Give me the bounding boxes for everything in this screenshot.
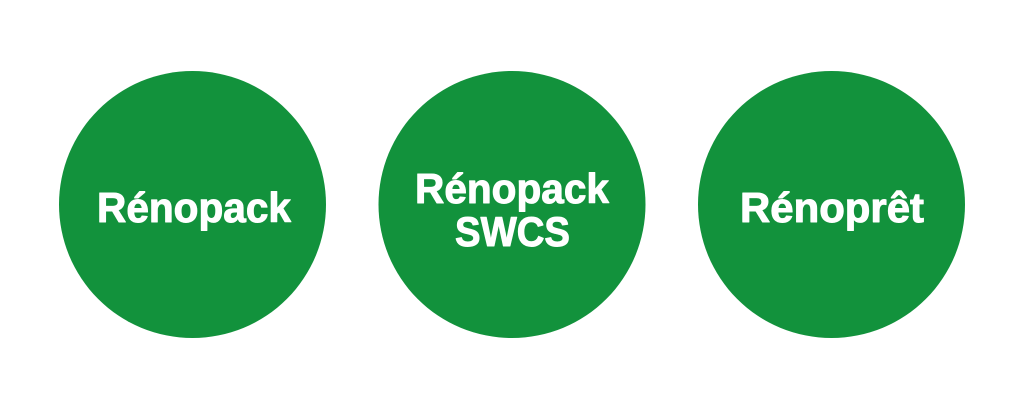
label: Rénoprêt: Rénoprêt <box>740 184 924 231</box>
panel: Rénopack SWCS <box>378 71 646 338</box>
label: Rénopack: Rénopack <box>97 184 292 231</box>
label: Rénopack SWCS: Rénopack <box>415 165 610 212</box>
circle: Rénoprêt background <box>698 71 965 338</box>
circle: Rénopack SWCS background <box>378 71 646 338</box>
circle: Rénopack background <box>59 71 326 338</box>
panel: Rénoprêt <box>698 71 965 338</box>
panel: Rénopack <box>59 71 326 338</box>
label: Rénopack SWCS <box>415 165 610 255</box>
label: Rénopack SWCS: SWCS <box>455 208 570 255</box>
